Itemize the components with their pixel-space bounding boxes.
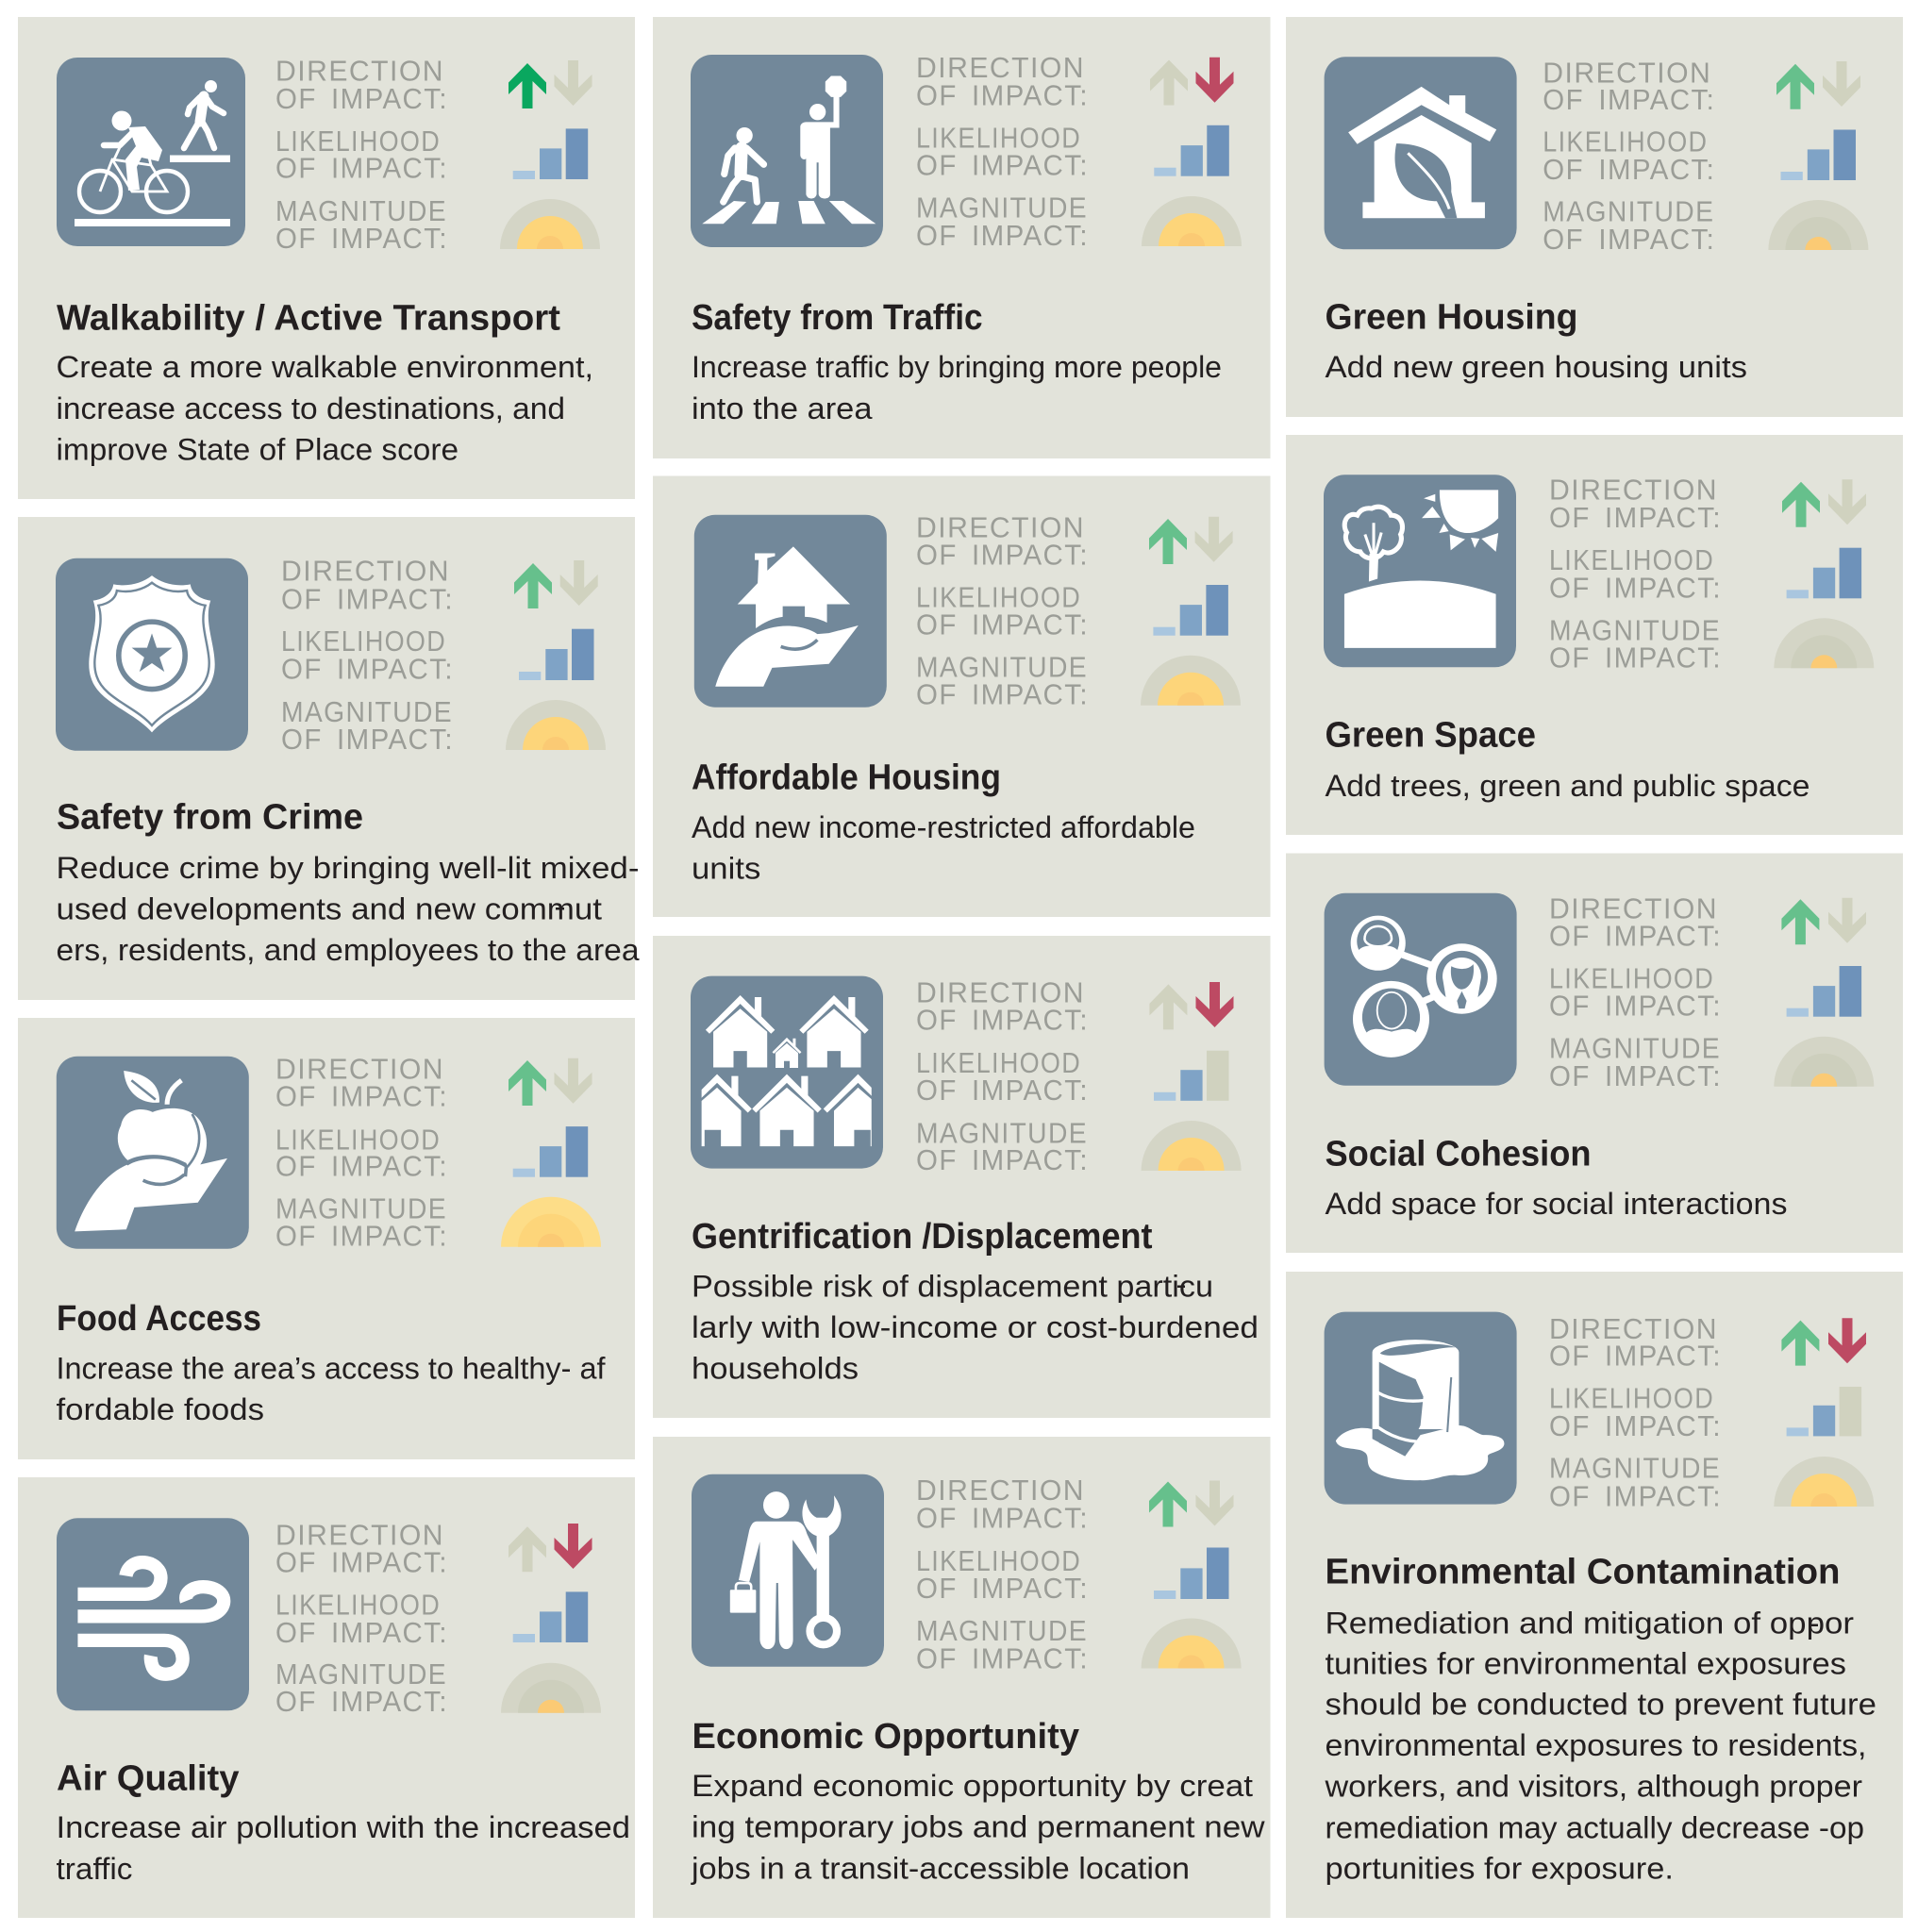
- description: Increase the area’s access to healthy- af: [57, 1352, 606, 1386]
- impact labels: OF IMPACT:: [916, 1641, 1089, 1675]
- impact labels: OF IMPACT:: [281, 723, 454, 756]
- likelihood bars: [513, 1591, 588, 1642]
- description: improve State of Place score: [57, 432, 459, 466]
- description: Increase air pollution with the increased: [57, 1810, 630, 1844]
- impact labels: MAGNITUDE: [1549, 1032, 1721, 1065]
- likelihood bars: [513, 1126, 588, 1177]
- impact labels: MAGNITUDE: [275, 1657, 447, 1690]
- magnitude gauge: [500, 199, 600, 249]
- description: [1324, 1606, 1876, 1885]
- magnitude gauge: [501, 1663, 601, 1713]
- impact labels: OF IMPACT:: [916, 219, 1089, 252]
- description: ing temporary jobs and permanent new: [692, 1809, 1265, 1843]
- description: [57, 851, 640, 967]
- description: households: [692, 1351, 859, 1385]
- impact labels: OF IMPACT:: [275, 1616, 448, 1649]
- magnitude gauge: [1142, 1121, 1242, 1171]
- direction arrows: [509, 60, 592, 108]
- magnitude gauge: [1141, 656, 1241, 706]
- impact labels: [275, 1518, 448, 1718]
- icon: crossing guard and pedestrian: [691, 55, 883, 247]
- impact labels: OF IMPACT:: [275, 1220, 448, 1253]
- description: Add trees, green and public space: [1325, 769, 1810, 803]
- panel: Economic Opportunity: [653, 1437, 1270, 1918]
- description: [57, 350, 593, 466]
- impact labels: MAGNITUDE: [916, 192, 1088, 225]
- impact labels: OF IMPACT:: [916, 149, 1089, 182]
- impact labels: OF IMPACT:: [1549, 1409, 1722, 1442]
- likelihood bars: [1153, 585, 1228, 636]
- likelihood bars: [1154, 1051, 1228, 1101]
- likelihood bars: [1154, 1547, 1228, 1599]
- impact labels: OF IMPACT:: [916, 1572, 1089, 1605]
- description: Expand economic opportunity by creat: [692, 1769, 1253, 1803]
- impact labels: [916, 510, 1089, 711]
- impact labels: [916, 1474, 1089, 1675]
- description: should be conducted to prevent future: [1325, 1687, 1876, 1721]
- description: remediation may actually decrease -op: [1325, 1811, 1864, 1845]
- description: units: [692, 851, 760, 885]
- impact labels: OF IMPACT:: [1543, 153, 1715, 186]
- impact labels: DIRECTION: [916, 976, 1085, 1009]
- magnitude gauge: [506, 700, 606, 750]
- impact labels: LIKELIHOOD: [1549, 962, 1714, 995]
- description: Add new green housing units: [1325, 350, 1747, 384]
- description: [692, 810, 1195, 885]
- impact labels: OF IMPACT:: [1549, 501, 1722, 534]
- direction arrows: [1781, 1318, 1866, 1366]
- impact labels: LIKELIHOOD: [916, 580, 1081, 613]
- description: portunities for exposure.: [1325, 1851, 1674, 1885]
- magnitude gauge: [1774, 1037, 1874, 1087]
- icon: tree, sun and park: [1324, 475, 1516, 667]
- impact labels: LIKELIHOOD: [275, 1589, 441, 1622]
- impact labels: OF IMPACT:: [281, 653, 454, 686]
- direction arrows: [1776, 61, 1860, 109]
- direction arrows: [1150, 58, 1234, 106]
- likelihood bars: [513, 128, 588, 179]
- impact labels: [916, 51, 1089, 252]
- heading: Green Space: [1325, 716, 1536, 756]
- impact labels: DIRECTION: [275, 1052, 444, 1085]
- impact labels: OF IMPACT:: [1543, 223, 1715, 256]
- description: jobs in a transit-accessible location: [691, 1851, 1190, 1885]
- impact labels: DIRECTION: [916, 1474, 1085, 1507]
- description: increase access to destinations, and: [57, 391, 565, 425]
- panel: Affordable Housing: [653, 475, 1270, 917]
- magnitude gauge: [501, 1197, 601, 1247]
- panel: Safety from Crime: [18, 517, 640, 1000]
- impact labels: OF IMPACT:: [1549, 920, 1722, 953]
- impact labels: DIRECTION: [275, 1518, 444, 1551]
- direction arrows: [1781, 898, 1866, 944]
- likelihood bars: [1787, 966, 1861, 1017]
- heading: Safety from Crime: [57, 797, 363, 837]
- impact labels: [275, 55, 448, 255]
- impact labels: MAGNITUDE: [916, 1116, 1088, 1149]
- impact labels: LIKELIHOOD: [275, 1123, 441, 1156]
- impact labels: [1543, 57, 1715, 256]
- icon: house in hand: [694, 515, 887, 708]
- magnitude gauge: [1768, 200, 1868, 250]
- impact labels: OF IMPACT:: [1549, 641, 1722, 675]
- impact labels: DIRECTION: [1549, 891, 1718, 924]
- impact labels: OF IMPACT:: [1549, 990, 1722, 1023]
- description: Create a more walkable environment,: [57, 350, 593, 384]
- impact labels: [275, 1052, 448, 1253]
- impact labels: OF IMPACT:: [275, 1079, 448, 1112]
- impact labels: [1549, 1312, 1722, 1513]
- impact labels: LIKELIHOOD: [275, 125, 441, 158]
- heading: Walkability / Active Transport: [57, 298, 560, 338]
- direction arrows: [1149, 982, 1234, 1029]
- impact labels: LIKELIHOOD: [1543, 125, 1708, 158]
- impact labels: DIRECTION: [275, 55, 444, 88]
- description: into the area: [692, 391, 873, 425]
- description: Increase traffic by bringing more people: [692, 350, 1222, 384]
- heading: Economic Opportunity: [692, 1717, 1079, 1757]
- direction arrows: [1782, 479, 1866, 527]
- description: Add new income-restricted affordable: [692, 810, 1195, 844]
- description: Remediation and mitigation of oppor: [1325, 1606, 1854, 1640]
- description: ers, residents, and employees to the area: [57, 933, 640, 967]
- impact labels: LIKELIHOOD: [916, 121, 1081, 154]
- likelihood bars: [1781, 130, 1856, 180]
- icon: apple in hand: [57, 1057, 249, 1249]
- likelihood bars: [519, 629, 594, 680]
- impact labels: OF IMPACT:: [275, 82, 448, 115]
- impact labels: OF IMPACT:: [1549, 571, 1722, 604]
- impact labels: OF IMPACT:: [275, 1685, 448, 1718]
- impact labels: MAGNITUDE: [275, 194, 447, 227]
- description: [57, 1352, 606, 1426]
- impact labels: LIKELIHOOD: [1549, 543, 1714, 576]
- direction arrows: [1149, 1481, 1234, 1526]
- impact labels: MAGNITUDE: [275, 1192, 447, 1225]
- icon: worker with wrench: [692, 1474, 884, 1667]
- impact labels: OF IMPACT:: [1543, 83, 1715, 116]
- impact labels: [281, 555, 454, 756]
- impact labels: MAGNITUDE: [1549, 1452, 1721, 1485]
- heading: Affordable Housing: [692, 758, 1001, 798]
- impact labels: OF IMPACT:: [281, 582, 454, 615]
- description: [691, 1769, 1265, 1885]
- icon: police badge: [56, 558, 248, 751]
- direction arrows: [509, 1058, 592, 1106]
- description: larly with low-income or cost-burdened: [692, 1310, 1259, 1344]
- magnitude gauge: [1142, 196, 1242, 246]
- impact labels: OF IMPACT:: [916, 608, 1089, 641]
- impact labels: [1549, 473, 1722, 675]
- impact labels: OF IMPACT:: [1549, 1059, 1722, 1092]
- panel: Walkability / Active Transport: [18, 17, 635, 499]
- icon: connected people: [1325, 893, 1517, 1086]
- impact labels: DIRECTION: [1543, 57, 1711, 89]
- impact labels: OF IMPACT:: [275, 1150, 448, 1183]
- heading: Environmental Contamination: [1325, 1553, 1840, 1592]
- impact labels: [1549, 891, 1722, 1092]
- description: fordable foods: [57, 1392, 264, 1426]
- impact labels: LIKELIHOOD: [281, 625, 446, 658]
- description: workers, and visitors, although proper: [1324, 1770, 1862, 1804]
- impact labels: MAGNITUDE: [1543, 194, 1714, 228]
- panel: Gentrification / Displacement: [653, 936, 1270, 1418]
- icon: neighbourhood houses: [682, 976, 892, 1169]
- panel: Social Cohesion: [1286, 853, 1903, 1253]
- panel: Environmental Contamination: [1286, 1272, 1903, 1918]
- direction arrows: [509, 1524, 592, 1572]
- impact labels: OF IMPACT:: [275, 222, 448, 255]
- heading: Safety from Traffic: [692, 298, 983, 338]
- description: [57, 1810, 630, 1886]
- impact labels: OF IMPACT:: [916, 1501, 1089, 1534]
- panel: Green Housing: [1286, 17, 1903, 417]
- magnitude gauge: [1774, 1457, 1874, 1507]
- panel: Green Space: [1286, 435, 1903, 835]
- icon: wind: [57, 1518, 249, 1710]
- impact labels: DIRECTION: [916, 510, 1085, 543]
- icon: house with leaf: [1325, 57, 1517, 249]
- heading: Gentrification /Displacement: [692, 1217, 1153, 1257]
- heading: Green Housing: [1325, 298, 1577, 338]
- impact labels: [916, 976, 1089, 1176]
- panel: Food Access: [18, 1018, 635, 1459]
- description: [692, 1270, 1259, 1385]
- impact labels: LIKELIHOOD: [1549, 1382, 1714, 1415]
- magnitude gauge: [1142, 1619, 1242, 1668]
- direction arrows: [514, 560, 598, 608]
- impact labels: DIRECTION: [281, 555, 450, 588]
- impact labels: LIKELIHOOD: [916, 1544, 1081, 1577]
- heading: Social Cohesion: [1325, 1135, 1591, 1174]
- description: tunities for environmental exposures: [1325, 1647, 1846, 1681]
- impact labels: MAGNITUDE: [916, 650, 1088, 683]
- impact labels: LIKELIHOOD: [916, 1046, 1081, 1079]
- impact labels: OF IMPACT:: [1549, 1479, 1722, 1513]
- description: Reduce crime by bringing well-lit mixed-: [57, 851, 640, 885]
- likelihood bars: [1787, 548, 1861, 598]
- impact labels: MAGNITUDE: [1549, 613, 1721, 646]
- impact labels: DIRECTION: [1549, 1312, 1718, 1345]
- impact labels: OF IMPACT:: [916, 78, 1089, 111]
- panel: Safety from Traffic: [653, 17, 1270, 458]
- description: traffic: [57, 1852, 132, 1886]
- impact labels: OF IMPACT:: [916, 538, 1089, 571]
- likelihood bars: [1154, 125, 1229, 176]
- heading: Food Access: [57, 1299, 261, 1339]
- heading: Air Quality: [57, 1758, 240, 1798]
- impact labels: OF IMPACT:: [275, 151, 448, 185]
- description: used developments and new commut: [57, 892, 602, 926]
- impact labels: OF IMPACT:: [1549, 1340, 1722, 1372]
- impact labels: MAGNITUDE: [281, 695, 453, 728]
- impact labels: MAGNITUDE: [916, 1614, 1088, 1647]
- impact labels: OF IMPACT:: [275, 1546, 448, 1579]
- panel: Air Quality: [18, 1477, 635, 1918]
- impact labels: OF IMPACT:: [916, 1003, 1089, 1036]
- impact labels: DIRECTION: [1549, 473, 1718, 506]
- description: Possible risk of displacement particu: [692, 1270, 1213, 1304]
- impact labels: OF IMPACT:: [916, 1143, 1089, 1176]
- description: Add space for social interactions: [1325, 1187, 1787, 1221]
- impact labels: OF IMPACT:: [916, 678, 1089, 711]
- icon: cyclist and pedestrian: [57, 58, 245, 246]
- description: [692, 350, 1222, 425]
- magnitude gauge: [1774, 618, 1874, 668]
- icon: leaking barrel: [1325, 1312, 1517, 1505]
- likelihood bars: [1787, 1387, 1861, 1436]
- description: environmental exposures to residents,: [1325, 1728, 1866, 1762]
- impact labels: OF IMPACT:: [916, 1074, 1089, 1107]
- direction arrows: [1149, 517, 1233, 564]
- impact labels: DIRECTION: [916, 51, 1085, 84]
